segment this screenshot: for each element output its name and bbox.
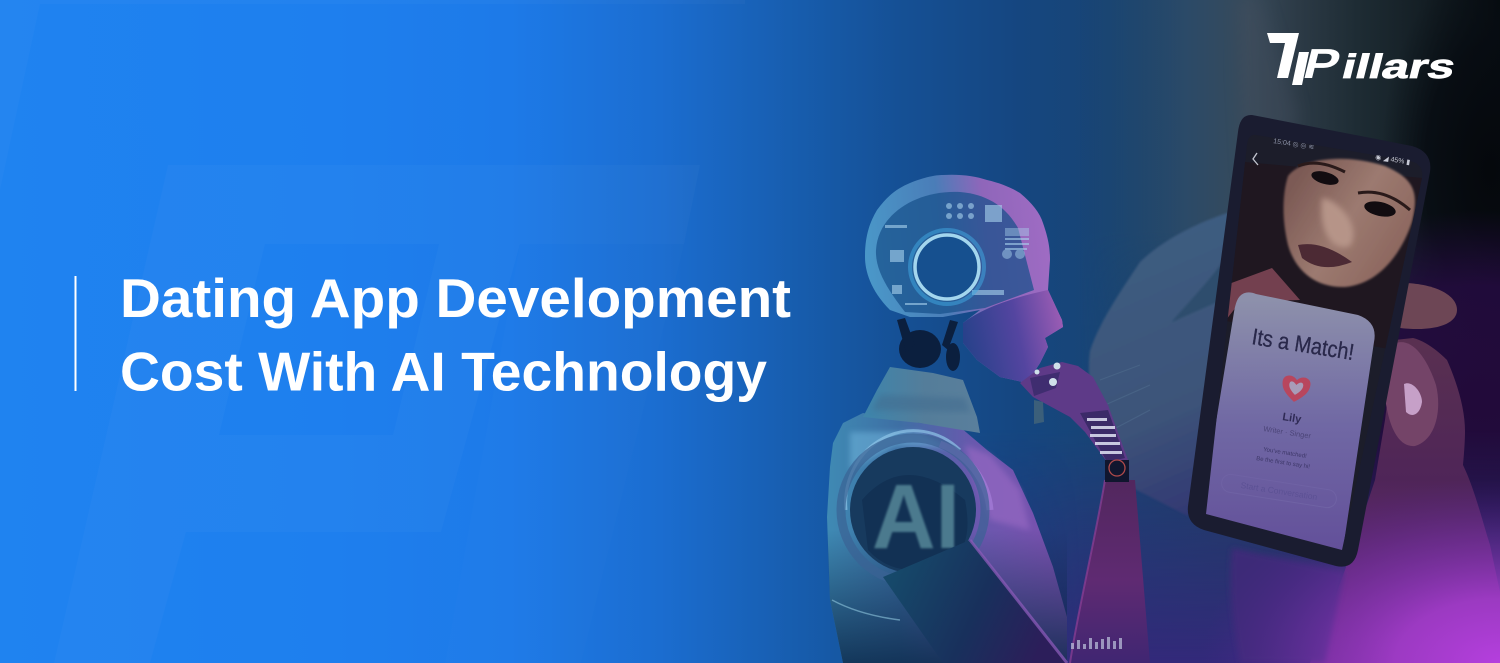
match name: Lily	[1282, 411, 1303, 426]
conversation button: Start a Conversation	[1240, 480, 1318, 502]
occupation: Writer · Singer	[1263, 424, 1312, 441]
photo backdrop: shirt and dark surroundings	[1033, 0, 1500, 663]
profile photo: lips	[1298, 244, 1352, 267]
title accent line	[74, 276, 76, 391]
wrist dot panel	[1080, 410, 1125, 462]
glowing ring	[915, 235, 979, 299]
watermark: faint logo shapes	[0, 0, 745, 663]
robot torso	[827, 318, 1067, 663]
profile photo: eyes	[1311, 171, 1396, 217]
conversation button	[1220, 473, 1338, 509]
phone body	[1188, 115, 1430, 567]
hand holding phone, left	[1089, 213, 1236, 516]
match card	[1200, 292, 1375, 556]
robot hand and wrist	[1020, 362, 1129, 482]
neck collar	[863, 367, 980, 433]
logo: 7Pillars	[1267, 33, 1459, 88]
robot head	[865, 175, 1063, 383]
profile photo: top clothing	[1228, 268, 1300, 318]
title	[120, 267, 791, 402]
HUD circuit panel	[876, 192, 1034, 314]
wrist joint	[1105, 460, 1129, 482]
match message	[1256, 447, 1311, 471]
knuckle joints	[1054, 362, 1060, 370]
logo: 7Pillars: illars	[1338, 48, 1459, 86]
title: Cost With AI Technology	[120, 340, 767, 402]
forearm bar chart	[1071, 637, 1122, 649]
title: Dating App Development	[120, 267, 791, 329]
neck cables	[897, 318, 960, 371]
phone screen	[1206, 157, 1422, 550]
smartphone	[1188, 115, 1430, 567]
lower arm plate	[883, 540, 1067, 663]
robot forearm, right	[1070, 480, 1150, 663]
heart icon	[1280, 375, 1311, 404]
cyan shoulder highlight	[850, 432, 950, 470]
profile photo: face	[1284, 159, 1415, 287]
lower face	[963, 290, 1063, 383]
shoulder ball	[850, 447, 976, 573]
smartphone: ◉ ◢ 45% ▮	[1375, 154, 1411, 167]
AI lettering: AI	[872, 466, 960, 568]
status bar: 15:04 ◎ ◎ ≋	[1273, 138, 1315, 151]
bottom-right purple glow	[1190, 470, 1500, 663]
back chevron	[1253, 153, 1258, 165]
hand holding phone, right fingers	[1230, 283, 1500, 663]
match title: Its a Match!	[1250, 323, 1356, 365]
profile photo: hair	[1220, 162, 1423, 350]
match message: Be the first to say hi!	[1256, 456, 1311, 471]
purple highlight	[965, 445, 1030, 530]
HUD glyphs	[885, 203, 1029, 305]
match message: You've matched!	[1263, 447, 1307, 460]
logo: 7Pillars: P	[1299, 41, 1345, 88]
shoulder rings	[846, 431, 960, 510]
torso band	[832, 600, 900, 620]
